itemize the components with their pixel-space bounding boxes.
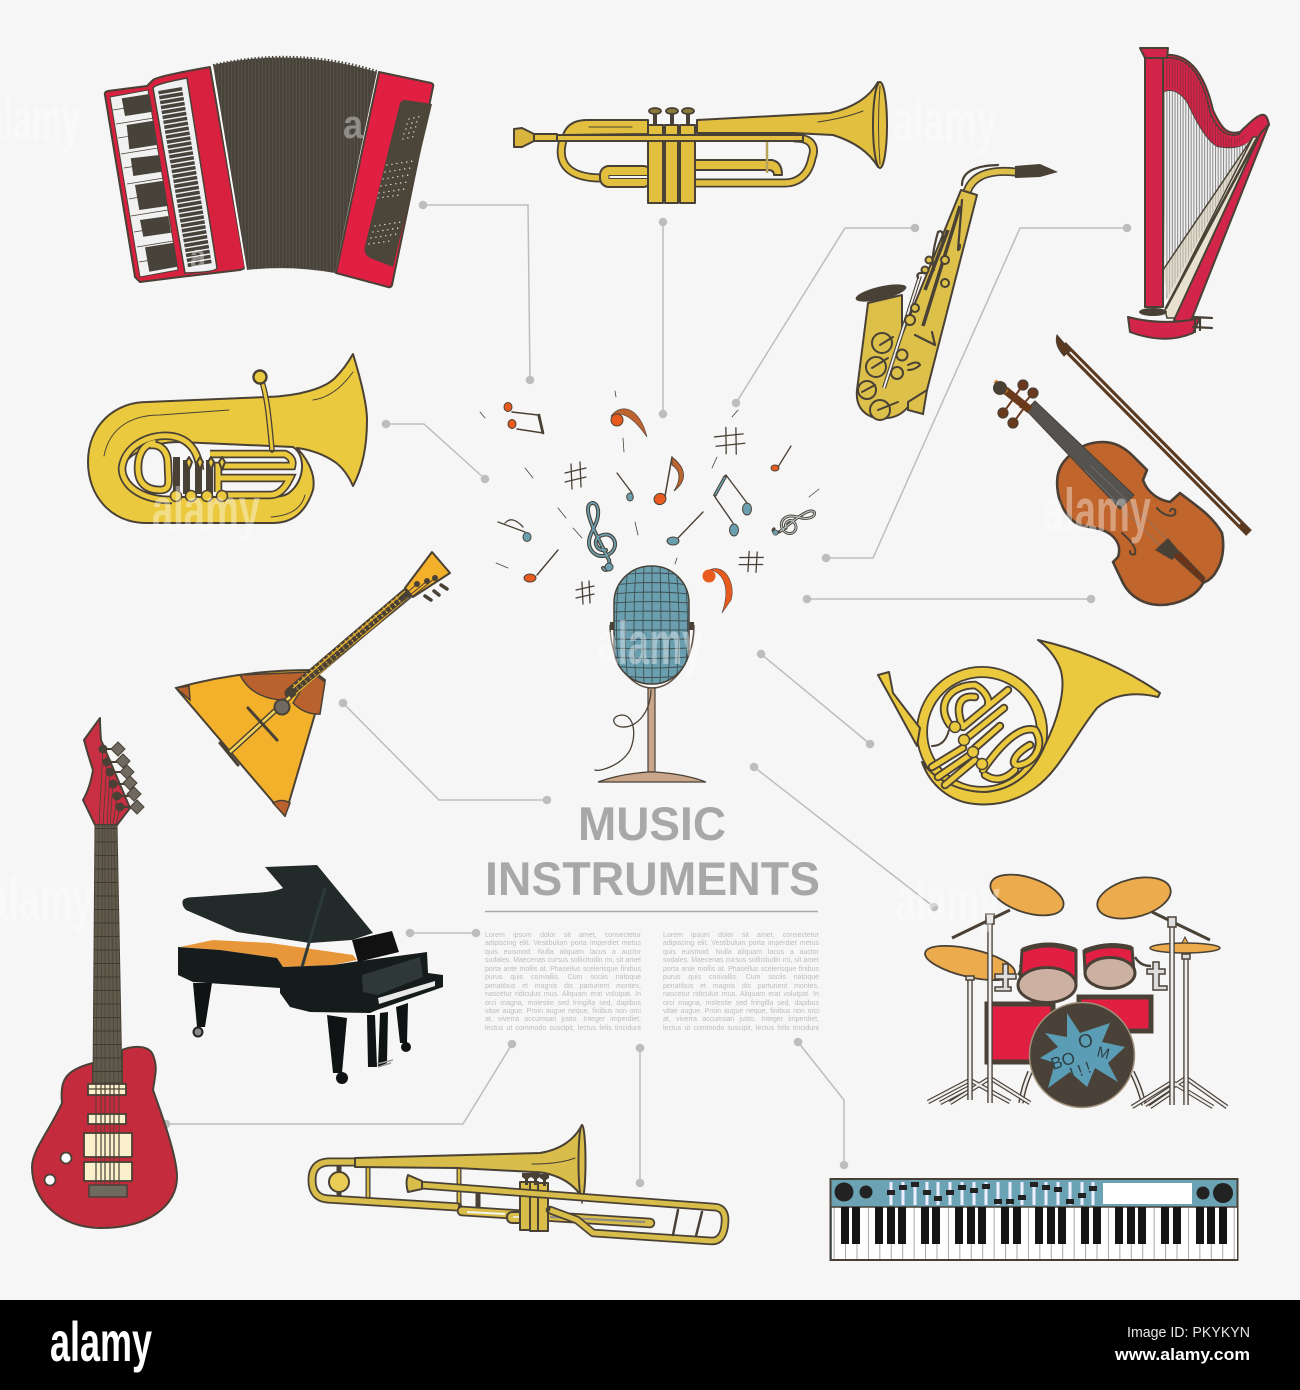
bass clef lower [702,569,732,613]
text block: right column: porta ante mollis at. Phasellus scelerisque finibus [663,966,819,973]
text block: right column: vitae augue. Proin augue neque, finibus non orci [663,1008,819,1015]
icon: harp [1128,48,1269,339]
text block: left column [485,932,641,1032]
text block: left column: quis euismod. Nulla aliquam lacus a auctor [485,949,641,956]
stock watermark: alamy [1043,477,1151,544]
sharp signs [565,425,765,604]
icon: french horn [878,640,1160,804]
treble clef large [588,503,615,571]
stock watermark: a [190,238,207,276]
bass clef top [611,409,647,437]
connector lines [162,201,1131,1187]
text block: right column: nascetur ridiculus mus. Aliquam erat volutpat. In [663,991,819,998]
icon: violin with bow [993,335,1249,605]
spark ticks [480,391,819,568]
icon: accordion [105,57,433,287]
text block: left column: sodales. Maecenas cursus sollicitudin mi, sit amet [485,957,641,964]
text block: right column: lectus ut commodo suscipit, lectus felis tincidunt [663,1025,819,1032]
footer bar: alamy [50,1310,152,1373]
icon: drum kit [922,867,1227,1108]
treble clef small [770,510,818,537]
text block: right column: at, viverra accumsan justo. Integer imperdiet, [663,1016,819,1023]
orange quarter note [524,550,558,582]
text block: left column: nascetur ridiculus mus. Aliquam erat volutpat. In [485,991,641,998]
text block: left column: vitae augue. Proin augue neque, finibus non orci [485,1008,641,1015]
icon: tuba [88,354,367,523]
stock watermark: alamy [893,88,997,155]
stock watermark [0,86,1151,934]
text block: right column: sodales. Maecenas cursus sollicitudin mi, sit amet [663,957,819,964]
text block: right column: penatibus et magnis dis parturient montes, [663,983,819,990]
small orange note [771,446,791,471]
beamed orange note [504,402,543,433]
teal flag note [498,520,531,542]
music notes [480,391,819,613]
footer bar [0,1300,1300,1390]
footer bar: www.alamy.com [1114,1345,1250,1364]
text block: left column: porta ante mollis at. Phasellus scelerisque finibus [485,966,641,973]
icon: drum kit: !!! [1068,1058,1097,1083]
orange eighth note [652,457,684,506]
text block: left column: orci magna, molestie sed fringilla sed, dapibus [485,1000,641,1006]
teal beamed note [715,475,752,536]
text block: right column: Lorem ipsum dolor sit amet, consectetur [663,932,819,939]
text block: right column: adipiscing elit. Vestibulum porta imperdiet metus [663,940,819,947]
icon: synthesizer keyboard [830,1179,1238,1260]
text block: right column: orci magna, molestie sed fringilla sed, dapibus [663,1000,819,1006]
title: INSTRUMENTS [485,852,820,905]
icon: drum kit: M [1095,1043,1111,1063]
icon: trumpet [514,82,887,203]
icon: microphone [595,566,706,782]
text block: left column: purus quis convallis. Cum sociis natoque [485,974,641,981]
text block: left column: penatibus et magnis dis parturient montes, [485,983,641,990]
stock watermark: alamy [597,610,703,677]
title: MUSIC [578,797,726,850]
text block: left column: at, viverra accumsan justo. Integer imperdiet, [485,1016,641,1023]
teal quarter note [667,512,703,545]
stock watermark: a [343,103,364,147]
icon: trombone [312,1125,725,1241]
text block: left column: adipiscing elit. Vestibulum porta imperdiet metus [485,940,641,947]
text block: right column: quis euismod. Nulla aliquam lacus a auctor [663,949,819,956]
icon: grand piano [178,865,443,1084]
icon: drum kit: O [1076,1030,1096,1054]
text block: right column: purus quis convallis. Cum sociis natoque [663,974,819,981]
icon: electric guitar [32,718,177,1228]
text block: left column: Lorem ipsum dolor sit amet, consectetur [485,932,641,939]
icon: drum kit: BO [1048,1048,1078,1074]
text block: left column: lectus ut commodo suscipit, lectus felis tincidunt [485,1025,641,1032]
stock watermark: alamy [152,476,260,543]
title [485,797,820,905]
stock watermark: alamy [895,867,1000,934]
icon: saxophone [854,164,1058,420]
small teal note [617,473,633,501]
text block: right column [663,932,819,1032]
icon: balalaika [176,552,450,816]
footer bar: Image ID: PKYKYN [1127,1324,1250,1341]
